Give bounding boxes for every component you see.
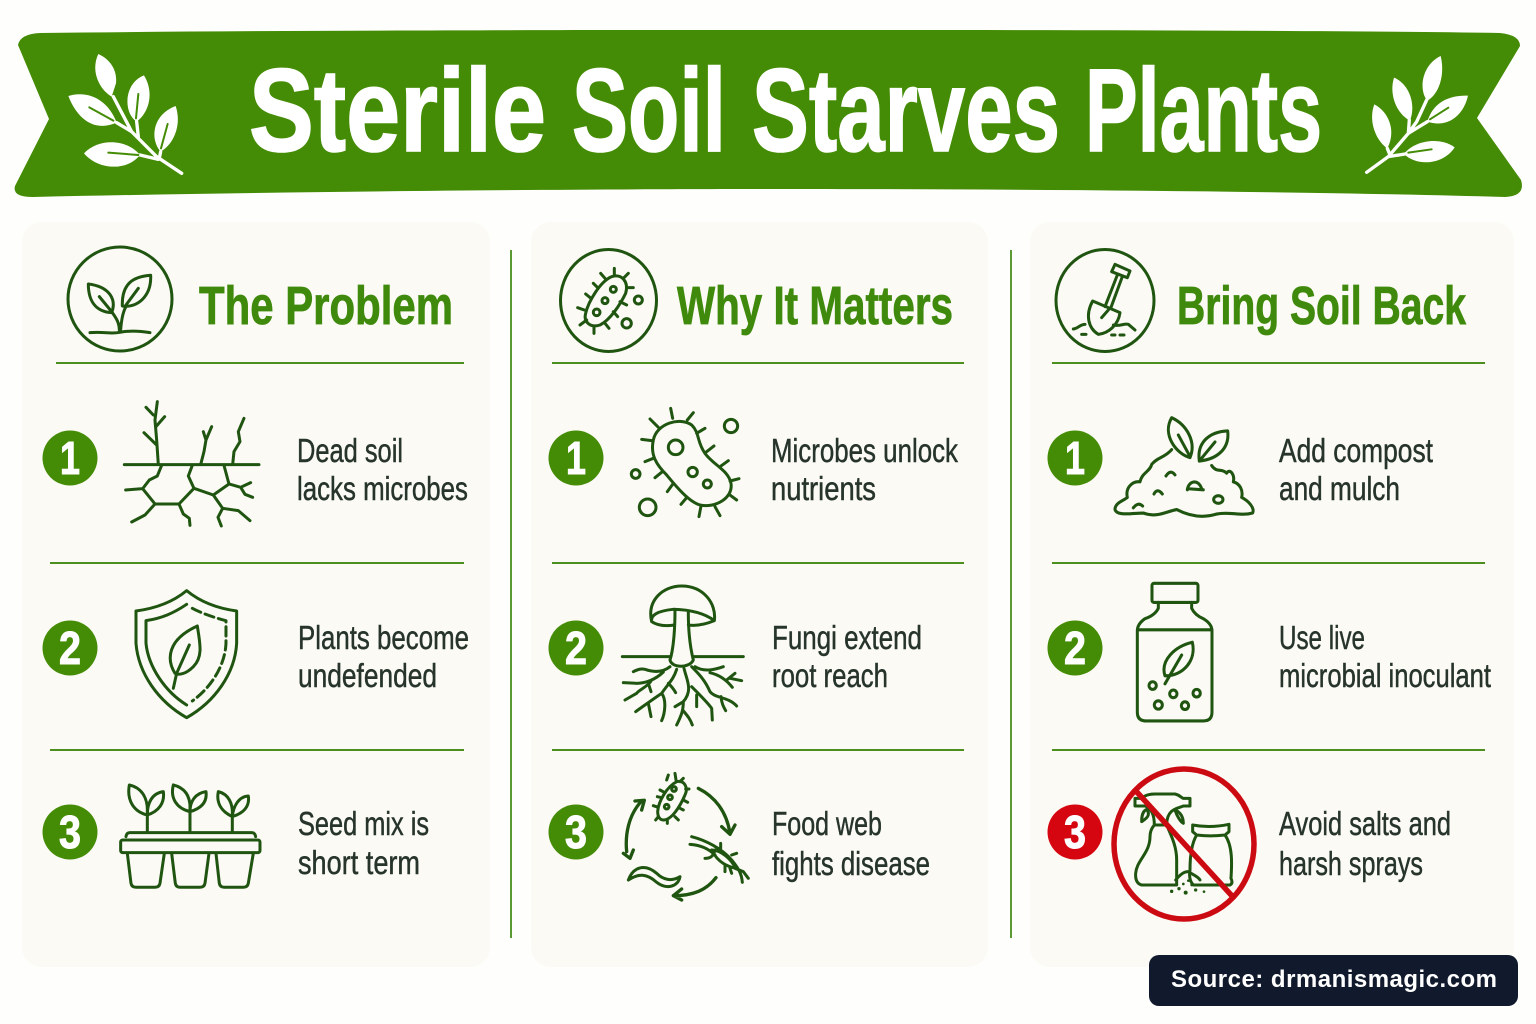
title text: Sterile [249,45,546,177]
item: seed mix [42,785,429,887]
item: seed mix: 3 [59,806,81,858]
text: microbes unlock nutrients: nutrients [771,470,876,507]
item: use live microbial inoculant [1048,583,1491,721]
text: microbes unlock nutrients [771,432,958,507]
text: food web fights disease: Food web [772,805,882,842]
icon: seedling tray [121,785,260,887]
text: seed mix is short term [298,805,429,881]
item: add compost and mulch: 1 [1065,432,1085,484]
item: fungi extend root reach [548,586,922,725]
item: fungi extend root reach: 2 [565,622,587,674]
title text: Soil [572,45,726,177]
item: undefended plants [42,591,469,718]
source badge [1149,955,1518,1006]
item: avoid salts and harsh sprays [1048,769,1451,919]
text: fungi extend root reach: root reach [772,657,888,694]
icon: inoculant bottle [1137,583,1212,721]
title text: Starves [752,45,1060,177]
text: dead soil: lacks microbes [297,470,468,507]
item: food web fights disease: 3 [565,806,587,858]
icon: right leaf sprig [1367,56,1468,172]
text: add compost and mulch: and mulch [1279,470,1400,507]
text: add compost and mulch [1279,432,1433,507]
text: plants become undefended [298,619,469,694]
icon: shield with leaf [136,591,237,718]
text: food web fights disease: fights disease [772,845,930,882]
source badge: Source: drmanismagic.com [1171,966,1497,993]
item: microbes unlock nutrients [548,408,958,517]
heading: why it matters: Why It Matters [677,276,953,336]
text: use live microbial inoculant: Use live [1279,619,1365,656]
text: add compost and mulch: Add compost [1279,432,1433,469]
icon: cracked soil [124,402,259,526]
icon: compost pile with leaves [1115,418,1253,516]
item: undefended plants: 2 [59,622,81,674]
panel: why it matters [531,222,988,967]
item: dead soil [42,402,468,526]
item: add compost and mulch [1048,418,1433,516]
icon: shovel in circle [1056,250,1154,352]
icon: mushroom with roots [622,586,743,725]
icon: bacterium [631,408,739,517]
text: fungi extend root reach: Fungi extend [772,619,922,656]
item: microbes unlock nutrients: 1 [566,432,586,484]
text: avoid salts and harsh sprays: harsh sprays [1279,845,1423,882]
text: seed mix is short term: short term [298,844,420,881]
text: dead soil [297,432,468,507]
icon: prohibited sprays and salts [1114,769,1254,919]
title text: Plants [1085,45,1322,177]
text: fungi extend root reach [772,619,922,694]
panel: the problem [22,222,490,967]
text: seed mix is short term: Seed mix is [298,805,429,842]
item: dead soil: 1 [60,432,80,484]
text: food web fights disease [772,805,930,882]
item: food web fights disease [548,773,930,900]
panel: bring soil back [1030,222,1514,967]
heading: the problem: The Problem [199,276,453,336]
title banner [15,30,1522,197]
text: dead soil: Dead soil [297,432,403,469]
text: plants become undefended: Plants become [298,619,469,656]
text: microbes unlock nutrients: Microbes unlock [771,432,958,469]
icon: sprout in circle [68,247,172,351]
item: use live microbial inoculant: 2 [1064,622,1086,674]
text: avoid salts and harsh sprays [1279,805,1451,882]
icon: soil food web cycle [623,773,748,900]
text: plants become undefended: undefended [298,657,437,694]
item: avoid salts and harsh sprays: 3 [1064,806,1086,858]
title text [249,45,1322,177]
icon: left leaf sprig [68,54,182,173]
text: use live microbial inoculant [1279,619,1491,694]
text: avoid salts and harsh sprays: Avoid salts and [1279,805,1451,842]
icon: microbe in circle [560,250,656,352]
